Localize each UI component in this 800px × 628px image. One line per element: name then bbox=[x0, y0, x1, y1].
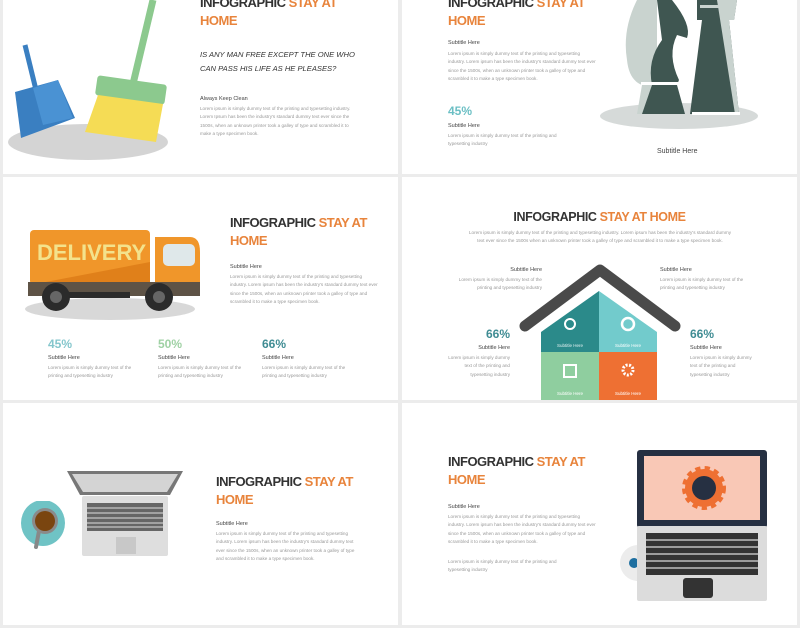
text block: Subtitle Here bbox=[448, 40, 480, 46]
text: top left: Subtitle Here bbox=[510, 267, 542, 273]
text block: Lorem ipsum is simply dummy text of the printing and typesetting industry bbox=[448, 133, 557, 146]
title: INFOGRAPHIC STAY AT bbox=[448, 454, 585, 469]
icon: laptop bbox=[67, 471, 183, 556]
house diagram: Subtitle Here bbox=[615, 343, 642, 348]
stat: 45%: 45% bbox=[48, 337, 72, 351]
text block bbox=[448, 40, 596, 146]
icon: broom and dustpan bbox=[8, 0, 168, 160]
intro text: Lorem ipsum is simply dummy text of the printing and typesetting industry. Lorem ipsum has been the industry's standard dummy text ever since the 1500s when an unknown printer took a galley of type and scrambled it to make a type specimen book. bbox=[469, 230, 731, 243]
house diagram: Subtitle Here bbox=[557, 391, 584, 396]
panel: laptop and coffee slide bbox=[3, 403, 398, 625]
stat: 66%: 66% bbox=[262, 337, 286, 351]
text block: Lorem ipsum is simply dummy text of the printing and typesetting industry. Lorem ipsum has been the industry's standard dummy text ever since the 1500s, when an unknown printer took a galley of type and scrambled it to make a type specimen book. bbox=[230, 274, 378, 304]
stat: right 66%: 66% bbox=[690, 327, 714, 341]
stat: 66%: Subtitle Here bbox=[262, 355, 294, 361]
title: INFOGRAPHIC STAY AT bbox=[216, 474, 353, 489]
icon: coffee cup bbox=[21, 501, 65, 549]
title: HOME bbox=[448, 472, 485, 487]
panel: delivery slide bbox=[3, 177, 398, 400]
stat: left 66%: Lorem ipsum is simply dummy text of the printing and typesetting industry bbox=[448, 355, 510, 377]
text: top right bbox=[660, 267, 743, 290]
quote: CAN PASS HIS LIFE AS HE PLEASES? bbox=[200, 64, 336, 72]
text: top left bbox=[459, 267, 542, 290]
text block: Subtitle Here bbox=[230, 264, 262, 270]
quote: IS ANY MAN FREE EXCEPT THE ONE WHO bbox=[200, 50, 355, 59]
text block bbox=[448, 504, 596, 572]
text block: Lorem ipsum is simply dummy text of the printing and typesetting industry. Lorem ipsum has been the industry's standard dummy text ever since the 1500s, when an unknown printer took a galley of type and scrambled it to make a type specimen book. bbox=[216, 531, 354, 561]
icon: laptop with gear bbox=[620, 450, 767, 601]
title: HOME bbox=[230, 233, 267, 248]
house diagram: Subtitle Here bbox=[615, 391, 642, 396]
panel: laptop gear slide bbox=[402, 403, 797, 625]
title bbox=[230, 215, 368, 248]
panel: cleaning slide bbox=[3, 0, 398, 174]
stat: 66% bbox=[262, 337, 345, 378]
stat: 66%: Lorem ipsum is simply dummy text of the printing and typesetting industry bbox=[262, 365, 345, 378]
stat: left 66%: 66% bbox=[486, 327, 510, 341]
stat: 45% bbox=[48, 337, 131, 378]
title bbox=[200, 0, 337, 28]
title: HOME bbox=[448, 13, 485, 28]
stat: 45%: Lorem ipsum is simply dummy text of the printing and typesetting industry bbox=[48, 365, 131, 378]
text: top right: Subtitle Here bbox=[660, 267, 692, 273]
icon: delivery truck: DELIVERY bbox=[37, 240, 147, 265]
title bbox=[448, 0, 585, 28]
text block: Lorem ipsum is simply dummy text of the printing and typesetting industry bbox=[448, 559, 557, 572]
stat: left 66%: Subtitle Here bbox=[478, 345, 510, 351]
icon: delivery truck bbox=[25, 230, 200, 320]
panel: house slide bbox=[402, 177, 797, 400]
stat: 50%: 50% bbox=[158, 337, 182, 351]
title bbox=[448, 454, 586, 487]
title: HOME bbox=[200, 13, 237, 28]
house diagram bbox=[520, 264, 680, 400]
quote bbox=[200, 50, 355, 72]
text block: Always Keep Clean bbox=[200, 96, 248, 102]
stat: 50%: Lorem ipsum is simply dummy text of the printing and typesetting industry bbox=[158, 365, 241, 378]
text block: Subtitle Here bbox=[216, 521, 248, 527]
text: top right: Lorem ipsum is simply dummy text of the printing and typesetting industry bbox=[660, 277, 743, 290]
text block: Lorem ipsum is simply dummy text of the printing and typesetting industry. Lorem ipsum has been the industry's standard dummy text ever since the 1500s, when an unknown printer took a galley of type and scrambled it to make a type specimen book. bbox=[448, 514, 596, 544]
title: HOME bbox=[216, 492, 253, 507]
stat: right 66% bbox=[690, 327, 752, 377]
text block: 45% bbox=[448, 104, 472, 118]
title: INFOGRAPHIC STAY AT bbox=[230, 215, 367, 230]
stat: 50% bbox=[158, 337, 241, 378]
text block: Subtitle Here bbox=[448, 504, 480, 510]
stat: right 66%: Lorem ipsum is simply dummy text of the printing and typesetting industry bbox=[690, 355, 752, 377]
text block: Lorem ipsum is simply dummy text of the printing and typesetting industry. Lorem Ipsum has been the industry's standard dummy text ever since the 1500s, when an unknown printer took a galley of type and scrambled it to make a type specimen book. bbox=[200, 106, 350, 136]
house diagram: Subtitle Here bbox=[557, 343, 584, 348]
text block: Lorem ipsum is simply dummy text of the printing and typesetting industry. Lorem ipsum has been the industry's standard dummy text ever since the 1500s, when an unknown printer took a galley of type and scrambled it to make a type specimen book. bbox=[448, 51, 596, 81]
title bbox=[216, 474, 354, 507]
text: top left: Lorem ipsum is simply dummy text of the printing and typesetting industry bbox=[459, 277, 542, 290]
icon: chess pieces bbox=[600, 0, 758, 129]
caption: Subtitle Here bbox=[657, 148, 697, 155]
stat: 45%: Subtitle Here bbox=[48, 355, 80, 361]
stat: left 66% bbox=[448, 327, 510, 377]
stat: 50%: Subtitle Here bbox=[158, 355, 190, 361]
stat: right 66%: Subtitle Here bbox=[690, 345, 722, 351]
text block: Subtitle Here bbox=[448, 123, 480, 129]
panel: chess slide bbox=[402, 0, 797, 174]
title: INFOGRAPHIC STAY AT HOME bbox=[513, 210, 686, 224]
